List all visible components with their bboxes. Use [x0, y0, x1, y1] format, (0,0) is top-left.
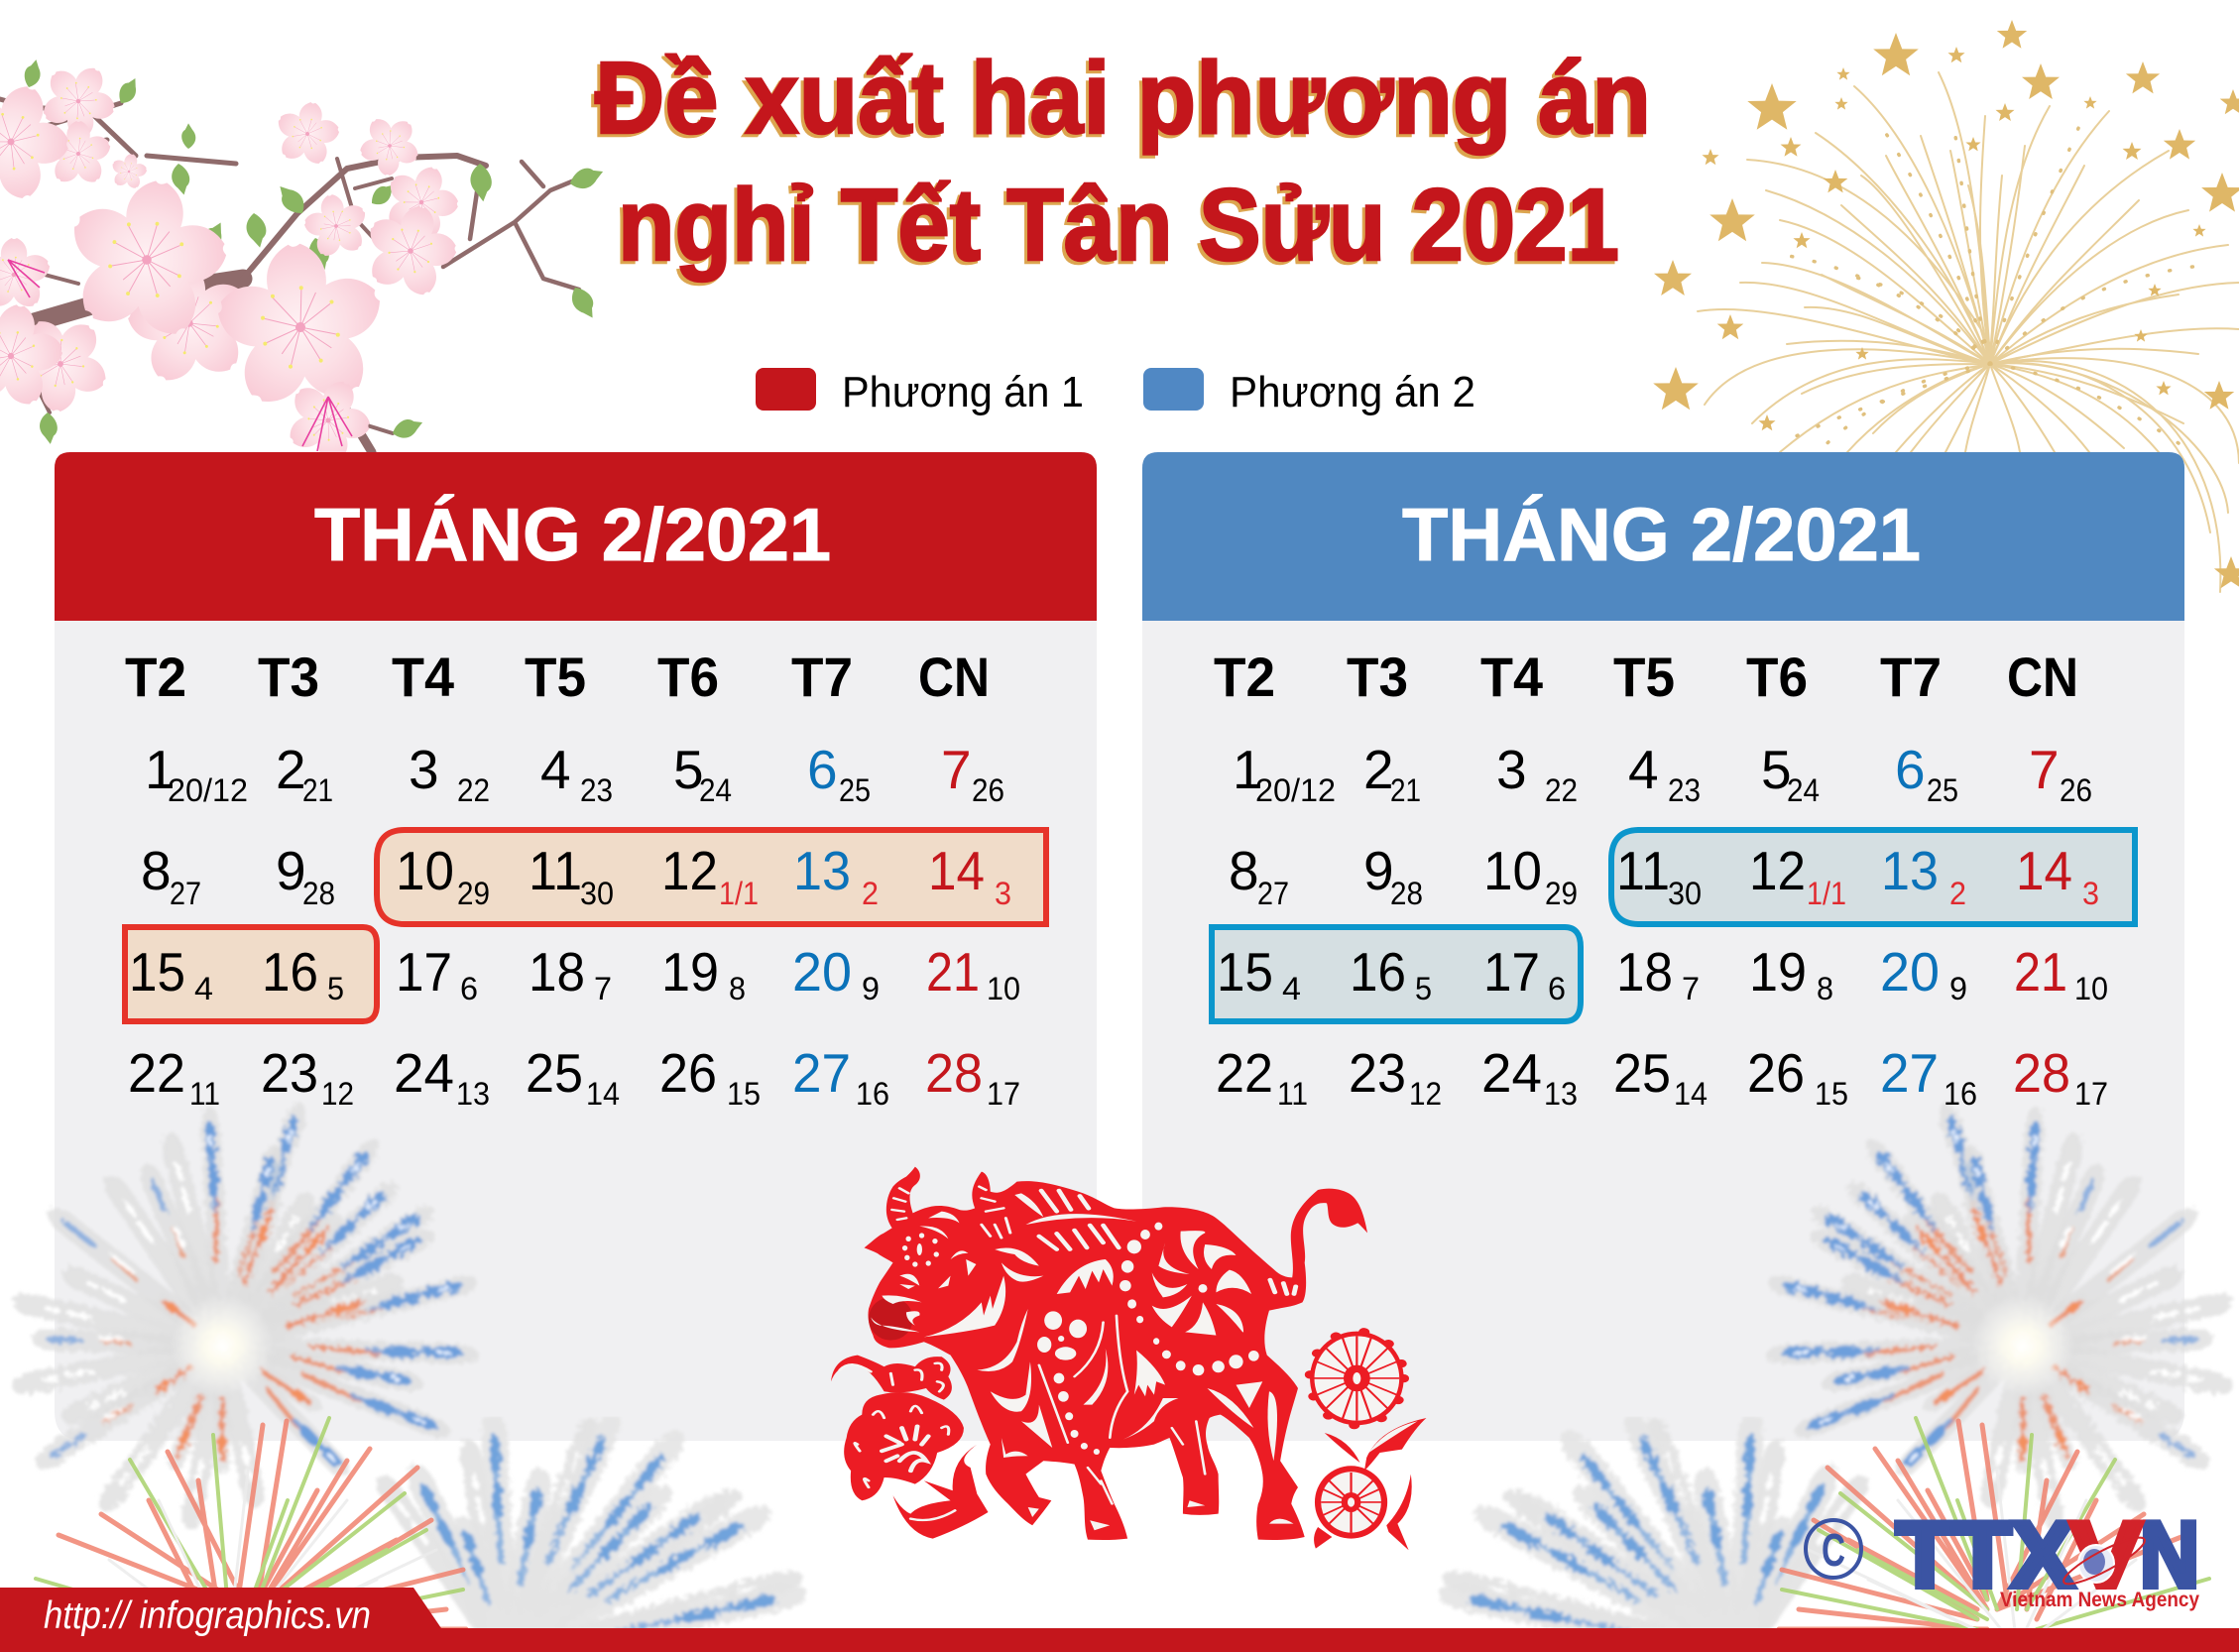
dates week 4: 24 [394, 1042, 454, 1104]
dates week 2: 13 [793, 840, 851, 901]
dates week 1: 21 [302, 772, 333, 808]
dates week 3: 6 [460, 971, 478, 1006]
weekday header: T2 [125, 646, 186, 708]
dates week 4: 15 [1815, 1076, 1848, 1112]
dates week 2: 29 [457, 876, 490, 911]
dates week 3: 10 [987, 971, 1020, 1006]
dates week 4: 16 [1944, 1076, 1977, 1112]
panel header: left month: THÁNG 2/2021 [314, 493, 831, 576]
dates week 3: 9 [862, 971, 880, 1006]
dates week 2: 9 [1363, 840, 1394, 901]
agency letters: TTX [1896, 1502, 2074, 1606]
dates week 3: 15 [1217, 941, 1273, 1003]
weekday header: CN [918, 646, 990, 708]
dates week 3: 7 [1682, 971, 1700, 1006]
dates week 1: 2 [276, 739, 306, 800]
dates week 4: 26 [659, 1042, 717, 1104]
dates week 3 [129, 941, 1020, 1006]
dates week 3: 20 [1880, 941, 1940, 1003]
fireworks right [1472, 1124, 2212, 1652]
dates week 2: 28 [302, 876, 335, 911]
dates week 2: 2 [1949, 876, 1966, 911]
dates week 3: 19 [1749, 941, 1807, 1003]
dates week 3: 19 [661, 941, 719, 1003]
dates week 3: 21 [2014, 941, 2067, 1003]
illustration: gold firework with stars [1653, 20, 2239, 592]
weekday header: T3 [258, 646, 319, 708]
legend: phương án 1: Phương án 1 [842, 368, 1084, 416]
dates week 2: 11 [1616, 840, 1670, 901]
dates week 3: 17 [1483, 941, 1540, 1003]
dates week 4: 24 [1481, 1042, 1542, 1104]
dates week 1: 5 [1761, 739, 1792, 800]
footer url: http:// infographics.vn [44, 1594, 371, 1637]
dates week 2: 1/1 [719, 876, 759, 911]
logo: TTXVN [1806, 1502, 2199, 1611]
illustration: peach blossom branch [0, 50, 607, 478]
weekday header: T7 [791, 646, 853, 708]
dates week 4: 17 [987, 1076, 1020, 1112]
dates week 4: 22 [1216, 1042, 1273, 1104]
dates week 3 [1217, 941, 2108, 1006]
dates week 2: 1/1 [1807, 876, 1846, 911]
dates week 2: 10 [396, 840, 454, 901]
left flower with leaves [831, 1356, 989, 1539]
dates week 4: 27 [1880, 1042, 1939, 1104]
dates week 1: 5 [673, 739, 704, 800]
ox cutouts [871, 1187, 1296, 1530]
dates week 1: 6 [1895, 739, 1926, 800]
dates week 1: 3 [1496, 739, 1527, 800]
dates week 1: 24 [699, 772, 732, 808]
dates week 2: 3 [2082, 876, 2099, 911]
calendar: left [125, 646, 1020, 1112]
agency letters [1896, 1502, 2199, 1606]
dates week 1: 23 [580, 772, 613, 808]
dates week 4 [128, 1042, 1020, 1112]
agency name: Vietnam News Agency [2000, 1589, 2199, 1611]
title [592, 41, 1651, 285]
illustration: red paper-cut ox with flowers [831, 1167, 1426, 1550]
dates week 2: 14 [2016, 840, 2072, 901]
dates week 1: 22 [1545, 772, 1578, 808]
dates week 2: 11 [529, 840, 582, 901]
weekday header: T6 [1746, 646, 1808, 708]
panel: left calendar background [55, 452, 1097, 1441]
dates week 1: 20/12 [1255, 772, 1336, 808]
dates week 1: 22 [457, 772, 490, 808]
dates week 2: 9 [276, 840, 306, 901]
dates week 4: 14 [586, 1076, 620, 1112]
dates week 3: 16 [262, 941, 318, 1003]
dates week 1: 21 [1390, 772, 1421, 808]
legend: phương án 2: Phương án 2 [1230, 368, 1475, 416]
dates week 1: 7 [941, 739, 972, 800]
dates week 1: 24 [1787, 772, 1820, 808]
dates week 2: 10 [1483, 840, 1542, 901]
dates week 4: 27 [792, 1042, 851, 1104]
dates week 2: 29 [1545, 876, 1578, 911]
panel: right calendar background [1142, 452, 2184, 1441]
dates week 4: 14 [1674, 1076, 1708, 1112]
weekday header [125, 646, 990, 708]
dates week 4: 15 [727, 1076, 761, 1112]
dates week 1: 4 [540, 739, 571, 800]
dates week 3: 5 [327, 971, 344, 1006]
dates week 4: 23 [1349, 1042, 1406, 1104]
dates week 3: 10 [2074, 971, 2108, 1006]
dates week 3: 18 [529, 941, 585, 1003]
legend [756, 368, 1475, 416]
weekday header: T4 [1480, 646, 1543, 708]
dates week 3: 15 [129, 941, 185, 1003]
weekday header: T7 [1880, 646, 1942, 708]
dates week 1: 25 [1927, 772, 1958, 808]
title line shadow: Đề xuất hai phương án [592, 44, 1648, 158]
dates week 3: 7 [594, 971, 612, 1006]
agency letters: V [2070, 1502, 2142, 1606]
dates week 2: 12 [661, 840, 718, 901]
dates week 3: 20 [792, 941, 852, 1003]
dates week 3: 17 [396, 941, 452, 1003]
dates week 3: 18 [1616, 941, 1673, 1003]
panel header: right month [1142, 452, 2184, 621]
ox muzzle [869, 1297, 913, 1341]
dates week 2: 30 [580, 876, 614, 911]
dates week 2: 8 [1229, 840, 1259, 901]
dates week 1: 4 [1628, 739, 1659, 800]
globe [2060, 1531, 2149, 1591]
dates week 3: 9 [1949, 971, 1967, 1006]
weekday header: T5 [1613, 646, 1675, 708]
dates week 1: 26 [972, 772, 1004, 808]
dates week 2: 27 [170, 876, 201, 911]
dates week 3: 6 [1548, 971, 1566, 1006]
weekday header: T4 [392, 646, 454, 708]
right flowers [1310, 1332, 1426, 1550]
dates week 3: 8 [1817, 971, 1833, 1006]
dates week 2: 2 [862, 876, 879, 911]
dates week 2: 27 [1257, 876, 1289, 911]
dates week 4: 26 [1747, 1042, 1805, 1104]
title text [595, 41, 1651, 282]
dates week 4: 25 [1613, 1042, 1671, 1104]
dates week 4: 25 [526, 1042, 583, 1104]
dates week 3: 5 [1415, 971, 1432, 1006]
dates week 4: 22 [128, 1042, 185, 1104]
dates week 4: 12 [321, 1076, 354, 1112]
dates week 4: 13 [1544, 1076, 1578, 1112]
weekday header [1214, 646, 2078, 708]
dates week 1: 7 [2029, 739, 2060, 800]
dates week 4: 23 [261, 1042, 318, 1104]
copyright mark [1806, 1520, 1861, 1578]
dates week 1: 23 [1668, 772, 1701, 808]
dates week 2: 30 [1668, 876, 1702, 911]
dates week 4: 28 [2013, 1042, 2070, 1104]
dates week 1: 25 [839, 772, 871, 808]
title line shadow [592, 44, 1648, 285]
highlight: option 1 range, week 2 [377, 830, 1046, 924]
dates week 4: 12 [1409, 1076, 1442, 1112]
dates week 4: 11 [1277, 1076, 1308, 1112]
dates week 1: 20/12 [168, 772, 248, 808]
dates week 3: 4 [1282, 971, 1301, 1006]
title text: Đề xuất hai phương án [595, 41, 1651, 155]
highlight: option 2 range, week 2 [1611, 830, 2135, 924]
dates week 4: 28 [925, 1042, 983, 1104]
dates week 4: 11 [189, 1076, 220, 1112]
calendar: right [1214, 646, 2108, 1112]
fireworks left [33, 1124, 773, 1652]
weekday header: CN [2007, 646, 2078, 708]
dates week 1 [145, 739, 1004, 808]
dates week 4: 16 [856, 1076, 889, 1112]
dates week 1: 6 [807, 739, 838, 800]
panel header: left month [55, 452, 1097, 621]
dates week 2: 3 [995, 876, 1011, 911]
dates week 1: 1 [145, 739, 176, 800]
dates week 2 [141, 840, 1011, 911]
agency letters: N [2140, 1502, 2199, 1606]
weekday header: T2 [1214, 646, 1275, 708]
dates week 3: 8 [729, 971, 746, 1006]
dates week 2 [1229, 840, 2099, 911]
title text: nghỉ Tết Tân Sửu 2021 [618, 168, 1619, 282]
dates week 1: 1 [1233, 739, 1263, 800]
dates week 4: 13 [456, 1076, 490, 1112]
panel header: right month: THÁNG 2/2021 [1402, 493, 1921, 576]
dates week 1: 2 [1363, 739, 1394, 800]
dates week 2: 13 [1881, 840, 1939, 901]
dates week 2: 28 [1390, 876, 1423, 911]
dates week 4: 17 [2074, 1076, 2108, 1112]
dates week 3: 16 [1350, 941, 1406, 1003]
dates week 4 [1216, 1042, 2108, 1112]
highlight: option 1 range, week 3 [125, 927, 377, 1021]
dates week 2: 12 [1749, 840, 1806, 901]
ox silhouette [865, 1167, 1367, 1540]
weekday header: T5 [525, 646, 586, 708]
weekday header: T6 [657, 646, 719, 708]
dates week 3: 21 [926, 941, 980, 1003]
dates week 1: 3 [409, 739, 439, 800]
dates week 2: 8 [141, 840, 172, 901]
dates week 1 [1233, 739, 2092, 808]
footer bar [0, 1588, 2239, 1652]
dates week 1: 26 [2060, 772, 2092, 808]
highlight: option 2 range, week 3 [1212, 927, 1581, 1021]
dates week 3: 4 [194, 971, 213, 1006]
dates week 2: 14 [928, 840, 985, 901]
copyright mark: C [1822, 1524, 1845, 1576]
weekday header: T3 [1347, 646, 1408, 708]
title line shadow: nghỉ Tết Tân Sửu 2021 [615, 171, 1616, 285]
